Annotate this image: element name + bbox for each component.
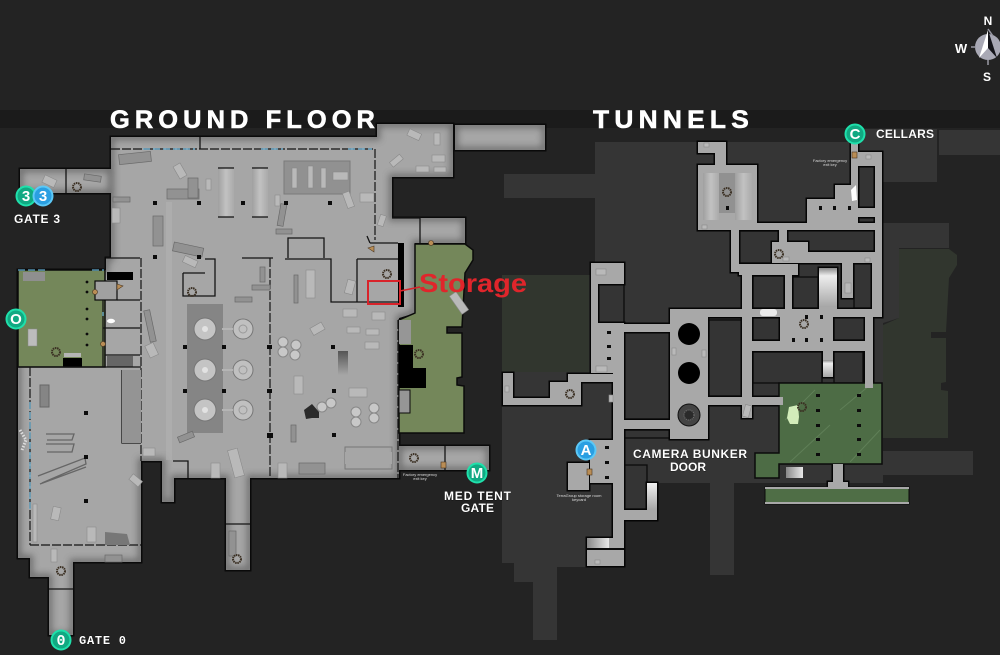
note: factory emergency exit key, ground floor: Factory emergency [403,472,437,477]
storage callout [368,268,527,304]
heading: ground floor: GROUND FLOOR [110,106,380,134]
note: terragroup keycard: keycard [572,497,586,502]
window strips [18,149,372,510]
marker: gate 3 green [16,186,36,206]
ground floor slab [18,124,545,635]
tunnel floors [503,142,882,566]
edge shading [18,124,545,635]
panel: ground floor map [18,124,545,635]
locks and rings [52,183,446,575]
tanks and spiral [678,323,700,426]
marker: C [846,124,864,144]
label: camera bunker door: DOOR [670,460,706,474]
tunnel walls [503,142,882,566]
silo cylinders [218,168,268,217]
green bunker [755,383,909,504]
marker: A [576,440,596,460]
storage leader line [400,287,420,291]
marker: M [468,464,486,482]
ground floor outline [18,124,545,635]
label: med tent gate: MED TENT [444,489,512,503]
marker: O: O [10,311,22,328]
marker: C: C [850,126,861,143]
marker: gate 3 green: 3 [22,188,30,205]
compass letters: W [955,41,968,56]
parking bay [284,161,350,194]
east green yard [398,243,473,433]
label: med tent gate [444,489,512,515]
note: factory emergency exit key, tunnels: exit key [823,162,837,167]
columns [84,201,336,503]
compass [955,14,1000,84]
label: med tent gate: GATE [461,501,494,515]
storage box [368,281,400,304]
lit shafts and bright patches [587,173,857,550]
main hall walls [30,137,445,589]
marker: 0: 0 [56,633,66,650]
label: camera bunker door: CAMERA BUNKER [633,447,747,461]
tunnel dark rooms [598,166,875,509]
note: factory emergency exit key, tunnels: Factory emergency [813,158,847,163]
vehicles and equipment [20,129,469,562]
storage drums [278,337,379,427]
west green yard [18,270,105,367]
marker: O [6,310,26,328]
faint ground floor ghost behind the tunnels [502,129,1000,640]
compass letters: S [983,70,991,84]
marker: A: A [581,442,592,459]
marker: gate 3 blue [34,186,52,206]
compass letters [955,14,992,84]
title band [0,110,1000,128]
label: camera bunker door [633,447,747,474]
marker: gate 3 blue: 3 [39,188,47,205]
panel: tunnels map [503,142,909,566]
compass letters: N [984,14,992,28]
tunnel rings, columns, small crates [505,143,871,564]
marker: M: M [471,465,483,482]
note: factory emergency exit key, ground floor [403,472,437,481]
interior rooms of west wing [18,258,141,545]
storage label: Storage [419,268,527,298]
tank floor with tanks [187,304,253,433]
marker: 0 [52,630,70,650]
label: gate 0: GATE 0 [79,634,126,648]
note: factory emergency exit key, tunnels [813,158,847,167]
heading: tunnels: TUNNELS [593,106,754,134]
note: terragroup keycard: TerraGroup storage room [557,493,602,498]
note: terragroup keycard [557,493,602,502]
label: cellars: CELLARS [876,127,934,141]
label: gate 3: GATE 3 [14,212,60,226]
note: factory emergency exit key, ground floor: exit key [413,476,427,481]
